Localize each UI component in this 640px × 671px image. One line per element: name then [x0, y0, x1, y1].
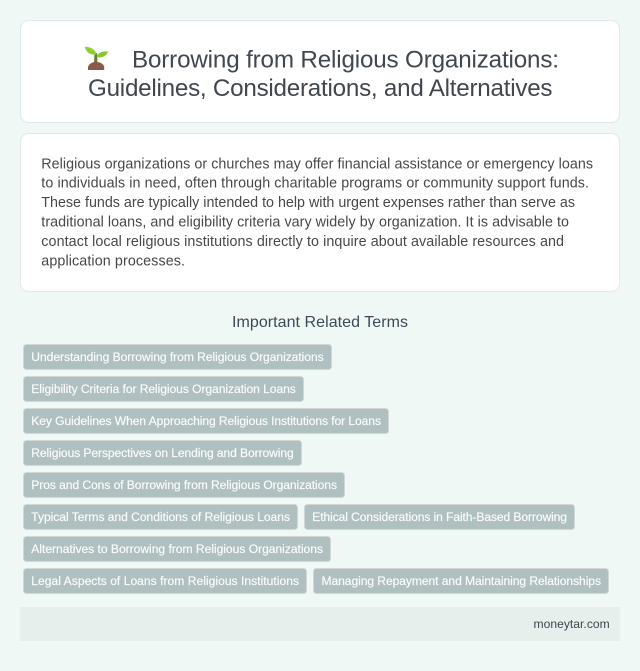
tag: Legal Aspects of Loans from Religious Institutions	[31, 574, 299, 588]
icon: seedling	[85, 47, 108, 70]
panel: title card	[20, 20, 620, 122]
heading: important related terms: Important Related Terms	[232, 314, 408, 331]
tag: Religious Perspectives on Lending and Borrowing	[31, 446, 294, 460]
tag	[24, 344, 332, 370]
tag	[24, 408, 388, 434]
description text: These funds are typically intended to help with urgent expenses rather than serve as	[41, 195, 575, 211]
tag: Alternatives to Borrowing from Religious Organizations	[31, 542, 323, 556]
panel: description card	[20, 134, 620, 292]
tag	[24, 568, 306, 594]
footer	[20, 607, 620, 641]
tag: Pros and Cons of Borrowing from Religious Organizations	[31, 478, 337, 492]
tag	[24, 440, 302, 466]
title: Guidelines, Considerations, and Alternatives	[88, 75, 552, 102]
description text: to individuals in need, often through charitable programs or community support funds.	[41, 176, 589, 192]
description text	[41, 156, 593, 270]
tag: Understanding Borrowing from Religious Organizations	[31, 350, 324, 364]
description text: Religious organizations or churches may offer financial assistance or emergency loans	[41, 156, 593, 172]
footer: moneytar.com	[534, 617, 610, 631]
description text: contact local religious institutions directly to inquire about available resources and	[41, 234, 564, 250]
panel: related terms tags	[24, 344, 608, 594]
tag	[24, 472, 344, 498]
tag: Ethical Considerations in Faith-Based Borrowing	[312, 510, 567, 524]
tag	[304, 504, 574, 530]
tag	[24, 504, 298, 530]
tag	[24, 536, 330, 562]
tag: Managing Repayment and Maintaining Relationships	[322, 574, 601, 588]
description text: traditional loans, and eligibility criteria vary widely by organization. It is advisable to	[41, 215, 569, 231]
title	[88, 46, 559, 102]
tag: Typical Terms and Conditions of Religious Loans	[31, 510, 290, 524]
description text: application processes.	[41, 254, 185, 270]
tag	[24, 376, 304, 402]
title: Borrowing from Religious Organizations:	[132, 46, 559, 74]
tag: Eligibility Criteria for Religious Organization Loans	[31, 382, 296, 396]
tag: Key Guidelines When Approaching Religious Institutions for Loans	[31, 414, 381, 428]
tag	[314, 568, 608, 594]
